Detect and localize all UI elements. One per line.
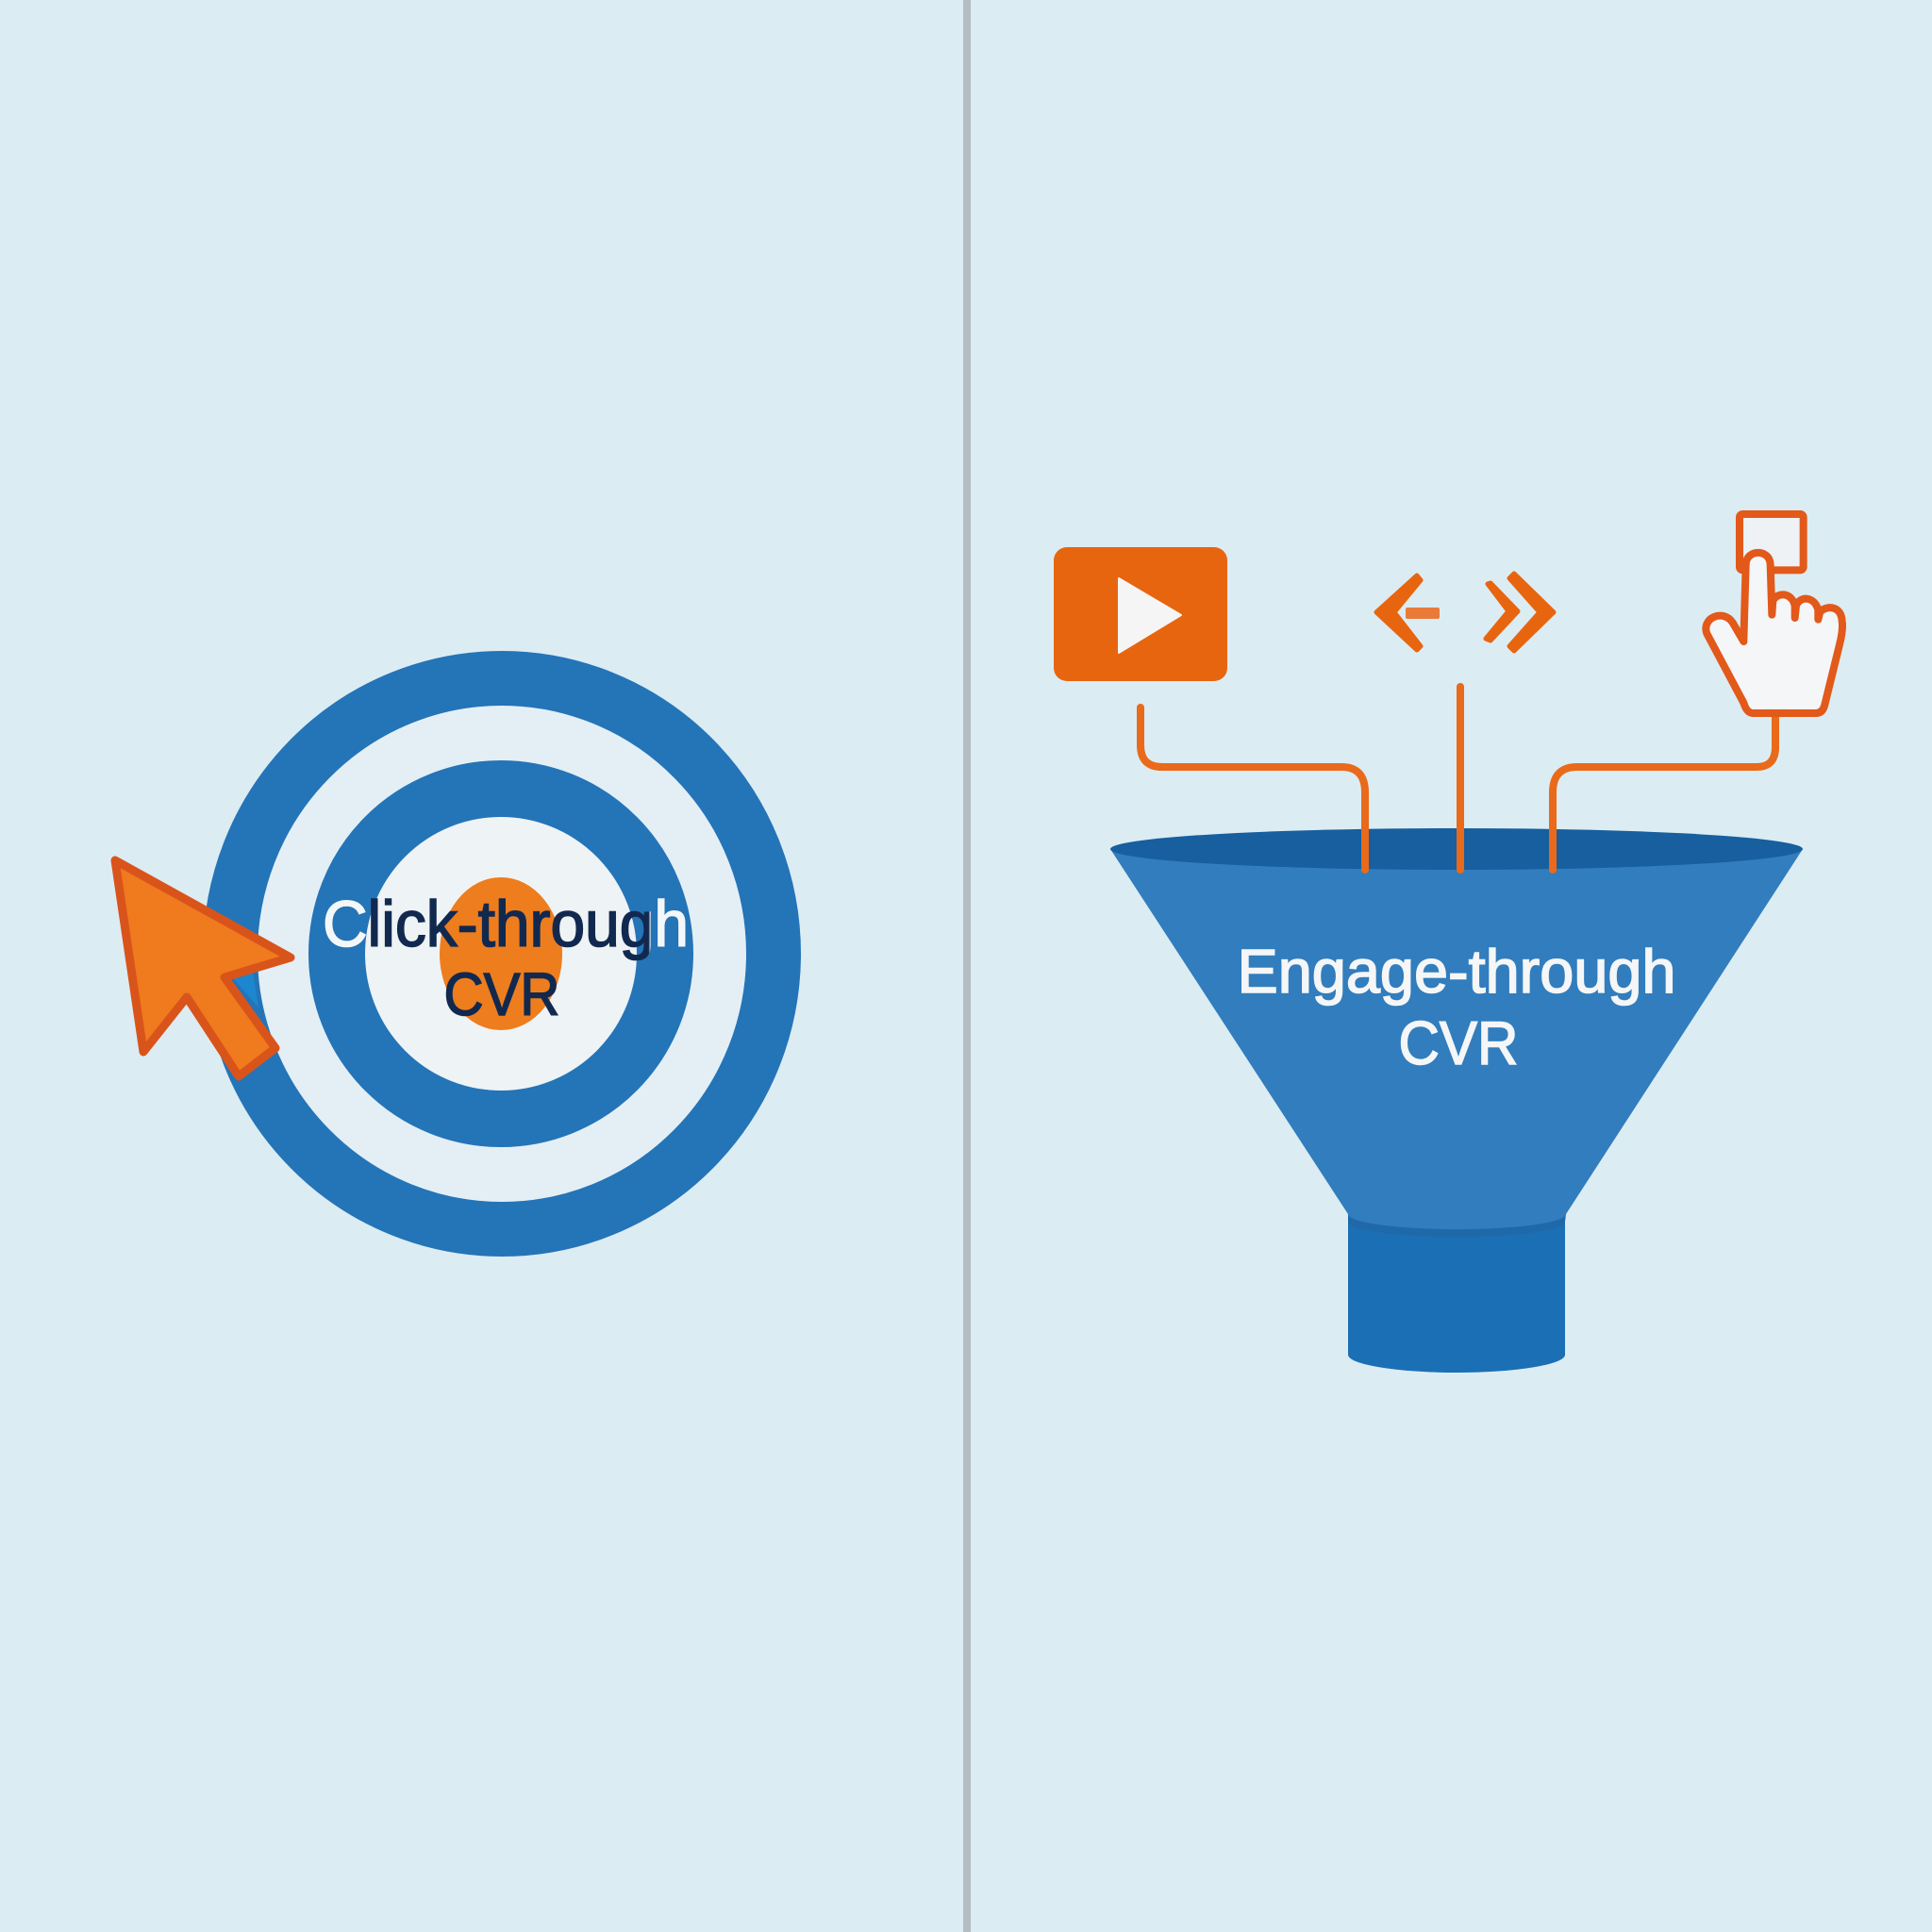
funnel spout (1348, 1216, 1565, 1373)
panel: click-through target (115, 678, 774, 1229)
label: click-through CVR (323, 888, 689, 1028)
panel: engage-through funnel (1054, 514, 1842, 1373)
funnel cone (1110, 849, 1803, 1229)
connector: swipe to funnel (1457, 687, 1464, 870)
funnel spout band (1348, 1214, 1566, 1237)
connector: tap to funnel (1553, 715, 1775, 870)
label: engage-through CVR: Engage-through (1238, 937, 1675, 1006)
target: bullseye (440, 877, 562, 1030)
funnel mouth (1110, 828, 1803, 870)
label: click-through CVR: Click-through (323, 888, 689, 960)
icon: video play (1054, 547, 1227, 681)
label: engage-through CVR (1238, 937, 1675, 1077)
target: inner ring (337, 789, 665, 1119)
icon: cursor arrow (115, 860, 291, 1076)
target: outer ring (230, 678, 774, 1229)
icon: swipe chevrons (1376, 574, 1554, 651)
label: engage-through CVR: CVR (1398, 1008, 1519, 1077)
divider (963, 0, 971, 1932)
icon: tapping hand (1706, 514, 1842, 713)
connector: video to funnel (1141, 708, 1365, 870)
label: click-through CVR: CVR (443, 960, 560, 1028)
